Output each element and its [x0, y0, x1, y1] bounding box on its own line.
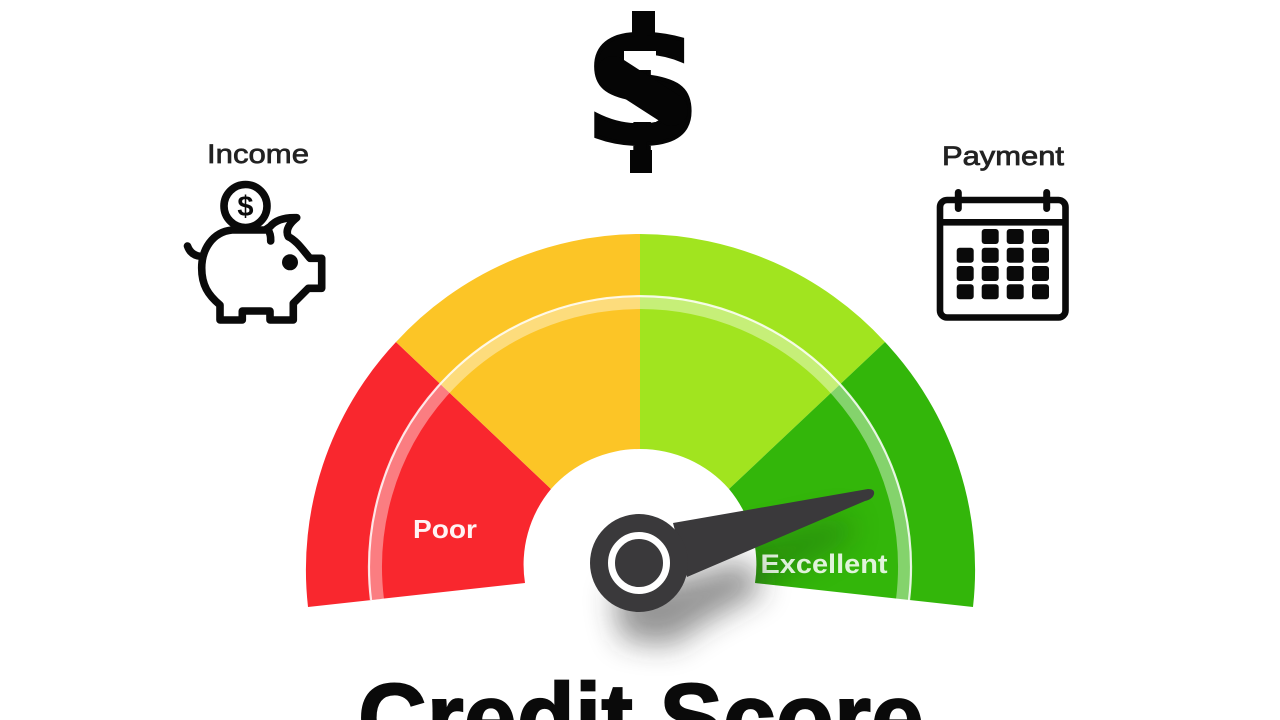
needle shadow on green — [755, 511, 857, 586]
icon: piggy bank: $ — [237, 191, 254, 223]
gauge segment: lime — [640, 234, 885, 489]
icon: calendar — [940, 189, 1066, 318]
payment label: Payment — [942, 141, 1065, 171]
poor label: Poor — [413, 514, 477, 544]
income label: Income — [207, 139, 309, 169]
needle — [590, 489, 874, 612]
gauge — [306, 234, 975, 607]
needle shadow — [612, 560, 765, 645]
icon: piggy bank — [188, 184, 322, 320]
gauge segment: yellow — [396, 234, 640, 489]
gauge segment: green — [729, 342, 975, 607]
gauge inner ring — [369, 296, 911, 600]
gauge segment: red — [306, 342, 551, 607]
excellent label: Excellent — [760, 549, 888, 579]
